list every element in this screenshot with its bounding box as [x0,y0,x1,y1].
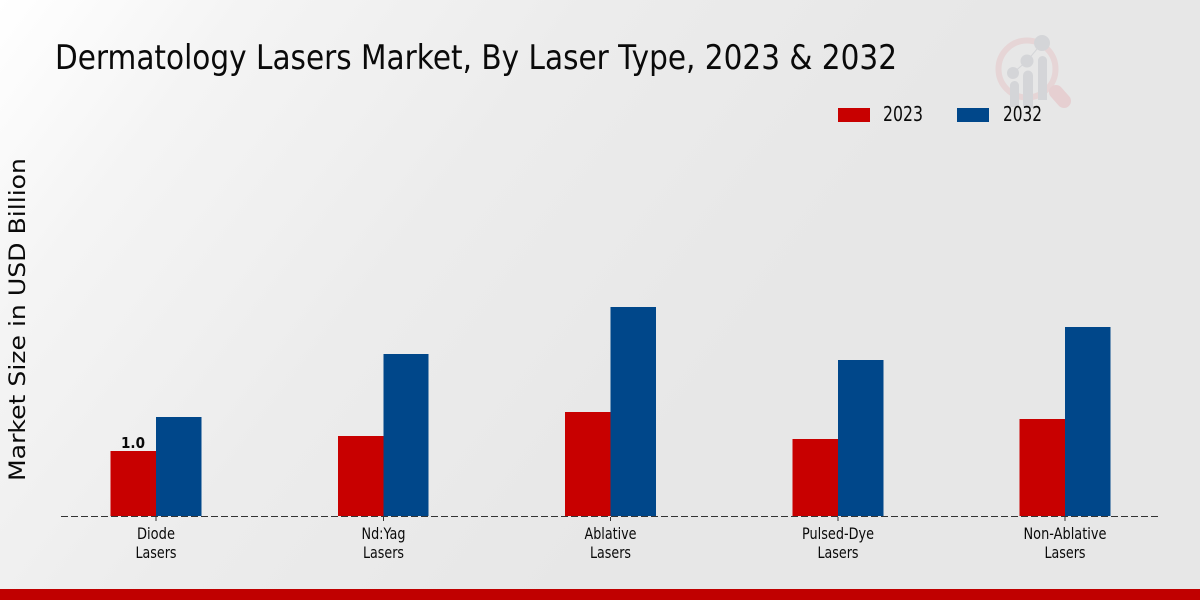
bottom red bar [0,589,1200,600]
label: Non-Ablative Lasers: Non-Ablative [1024,524,1106,543]
bars: Pulsed-Dye Lasers [792,360,884,516]
label: Ablative Lasers: Lasers [590,543,631,562]
label: Nd:Yag Lasers: Nd:Yag [362,524,406,543]
bar chart [61,307,1160,521]
legend [838,102,1042,126]
label: Diode Lasers: Lasers [136,543,176,562]
label: Pulsed-Dye Lasers [802,524,874,562]
label: Nd:Yag Lasers: Lasers [363,543,404,562]
y axis label: Market Size in USD Billion [6,158,31,481]
label: Diode Lasers: Diode [137,524,175,543]
label: Non-Ablative Lasers [1024,524,1106,562]
x axis labels [136,524,1106,562]
label: Nd:Yag Lasers [362,524,406,562]
bars: Non-Ablative Lasers [1020,327,1110,516]
label: Pulsed-Dye Lasers: Lasers [818,543,858,562]
bars: Ablative Lasers [565,307,656,516]
bars: Diode Lasers [110,417,202,516]
bars: Nd:Yag Lasers [338,354,428,516]
legend label 2023: 2023 [883,102,923,126]
legend label 2032: 2032 [1003,102,1042,126]
label: Pulsed-Dye Lasers: Pulsed-Dye [802,524,874,543]
label: Diode Lasers [136,524,176,562]
label: Non-Ablative Lasers: Lasers [1044,543,1086,562]
title: Dermatology Lasers Market, By Laser Type, 2023 & 2032 [55,38,897,78]
legend swatch 2023 [838,108,870,122]
label: Ablative Lasers [584,524,636,562]
value label 1.0: 1.0 [121,434,145,452]
logo watermark [998,35,1064,108]
legend swatch 2032 [957,108,989,122]
label: Ablative Lasers: Ablative [584,524,636,543]
